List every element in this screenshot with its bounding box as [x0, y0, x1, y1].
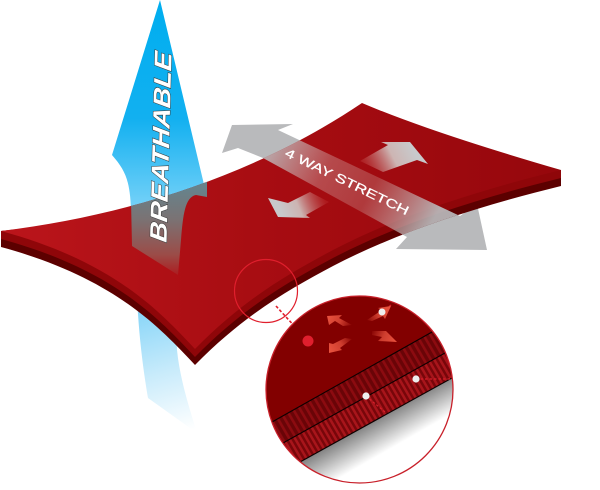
magnifier: enlarged fabric cross section: [265, 295, 454, 484]
lens: layer lines: [272, 332, 452, 462]
label: 4 way stretch: 4 WAY STRETCH: [283, 146, 411, 218]
breathable arrow seen through fabric: [131, 175, 207, 275]
fabric middle layer: [1, 170, 561, 357]
lens: upper fibre band: [272, 332, 445, 442]
label: breathable: BREATHABLE: [146, 49, 177, 244]
stretch arrow: pointing up right: [360, 142, 428, 172]
lens: lower fibre band: [284, 354, 452, 461]
fabric underside dark layer: [1, 170, 561, 365]
magnifier: dashed leader line: [276, 306, 308, 341]
fabric top surface: [1, 103, 561, 349]
lens: dashed callout lines: [366, 305, 452, 412]
stretch arrow: pointing down left: [268, 192, 329, 218]
breathable arrow head: [112, 0, 207, 275]
fabric sheet: [1, 103, 561, 365]
lens: fabric surface: [266, 296, 432, 422]
lens: backing shadow: [301, 378, 452, 478]
magnifier: small circle on fabric: [234, 260, 298, 322]
breathable arrow tail: [136, 290, 197, 433]
magnifier: red anchor dot: [302, 336, 314, 346]
stretch arrow: grey diagonal silhouette: [222, 124, 487, 250]
stretch band across fabric: [264, 140, 458, 234]
lens: white points: [362, 308, 420, 400]
lens: small stretch arrows: [327, 306, 397, 353]
lens: outline: [266, 296, 453, 483]
lens contents: [266, 296, 452, 478]
